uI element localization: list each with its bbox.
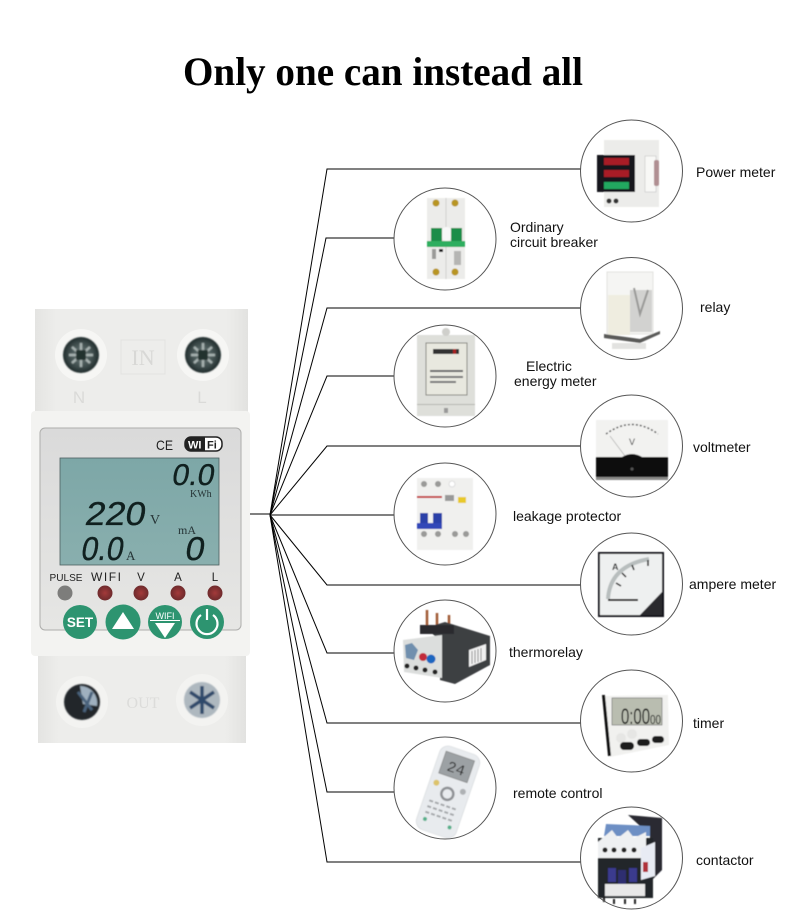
- button: power: [190, 605, 224, 639]
- device upper terminal block: L: [197, 388, 207, 407]
- label: contactor: contactor: [696, 852, 754, 868]
- item: ordinary circuit breaker: [394, 188, 496, 290]
- device face panel: [40, 428, 241, 630]
- item: relay: [580, 258, 682, 360]
- certification marks: CE: [156, 437, 173, 453]
- indicator labels: L: [212, 572, 219, 584]
- label: electric energy meter: energy meter: [514, 373, 597, 389]
- device upper terminal block: IN: [131, 345, 155, 370]
- item: voltmeter: V: [629, 437, 635, 447]
- indicator leds: [58, 586, 222, 600]
- item: timer: 00: [650, 712, 661, 727]
- device lower terminal block: OUT: [127, 695, 160, 712]
- button: wifi down: [148, 605, 182, 639]
- lcd screen: 0.0: [79, 531, 127, 568]
- device upper terminal block: N: [73, 388, 85, 407]
- button: up: [106, 604, 140, 640]
- item: voltmeter: [580, 395, 682, 497]
- lcd screen: 0: [183, 531, 208, 568]
- item: contactor: [580, 807, 682, 909]
- label: voltmeter: voltmeter: [693, 439, 751, 455]
- item: electric energy meter: [394, 325, 496, 427]
- certification marks: [156, 437, 222, 453]
- device upper terminal block: [35, 309, 248, 412]
- item: remote control: 24: [444, 759, 467, 781]
- label: ordinary circuit breaker: circuit breaker: [510, 234, 598, 250]
- label: relay: relay: [700, 299, 730, 315]
- button: set: SET: [67, 615, 94, 630]
- label: remote control: remote control: [513, 785, 602, 801]
- label: leakage protector: leakage protector: [513, 508, 622, 524]
- label: ordinary circuit breaker: Ordinary: [510, 219, 564, 235]
- lcd screen: 0.0: [170, 459, 218, 492]
- certification marks: WI: [188, 440, 201, 452]
- lcd screen: KWh: [190, 489, 212, 500]
- item: thermorelay: [394, 600, 496, 702]
- item: power meter: [580, 120, 682, 222]
- label: power meter: Power meter: [696, 164, 776, 180]
- connector lines: [250, 169, 581, 862]
- title: Only one can instead all: [183, 49, 583, 94]
- indicator labels: A: [174, 572, 182, 584]
- label: timer: timer: [693, 715, 724, 731]
- label: ampere meter: ampere meter: [689, 576, 776, 592]
- indicator labels: PULSE: [50, 572, 82, 584]
- item: timer: [580, 670, 682, 772]
- item: leakage protector: [394, 463, 496, 565]
- lcd screen: A: [126, 548, 136, 563]
- button: wifi down: WIFI: [156, 611, 174, 621]
- device centre body: [31, 411, 250, 656]
- certification marks: Fi: [207, 440, 217, 452]
- lcd screen: V: [150, 513, 160, 528]
- indicator labels: V: [137, 572, 145, 584]
- indicator labels: [50, 570, 219, 584]
- device lower terminal block: [38, 655, 246, 743]
- item: ampere meter: [580, 533, 682, 635]
- device: din rail meter: [31, 309, 250, 743]
- item: timer: 0:00: [621, 704, 650, 729]
- lcd screen: [60, 458, 219, 568]
- button: set: [63, 605, 97, 639]
- item: remote control: [394, 737, 496, 840]
- lcd screen: mA: [178, 523, 196, 537]
- label: thermorelay: thermorelay: [509, 644, 583, 660]
- label: electric energy meter: Electric: [526, 358, 572, 374]
- item: ampere meter: A: [612, 562, 619, 572]
- indicator labels: WIFI: [91, 570, 121, 584]
- lcd screen: 220: [83, 496, 149, 533]
